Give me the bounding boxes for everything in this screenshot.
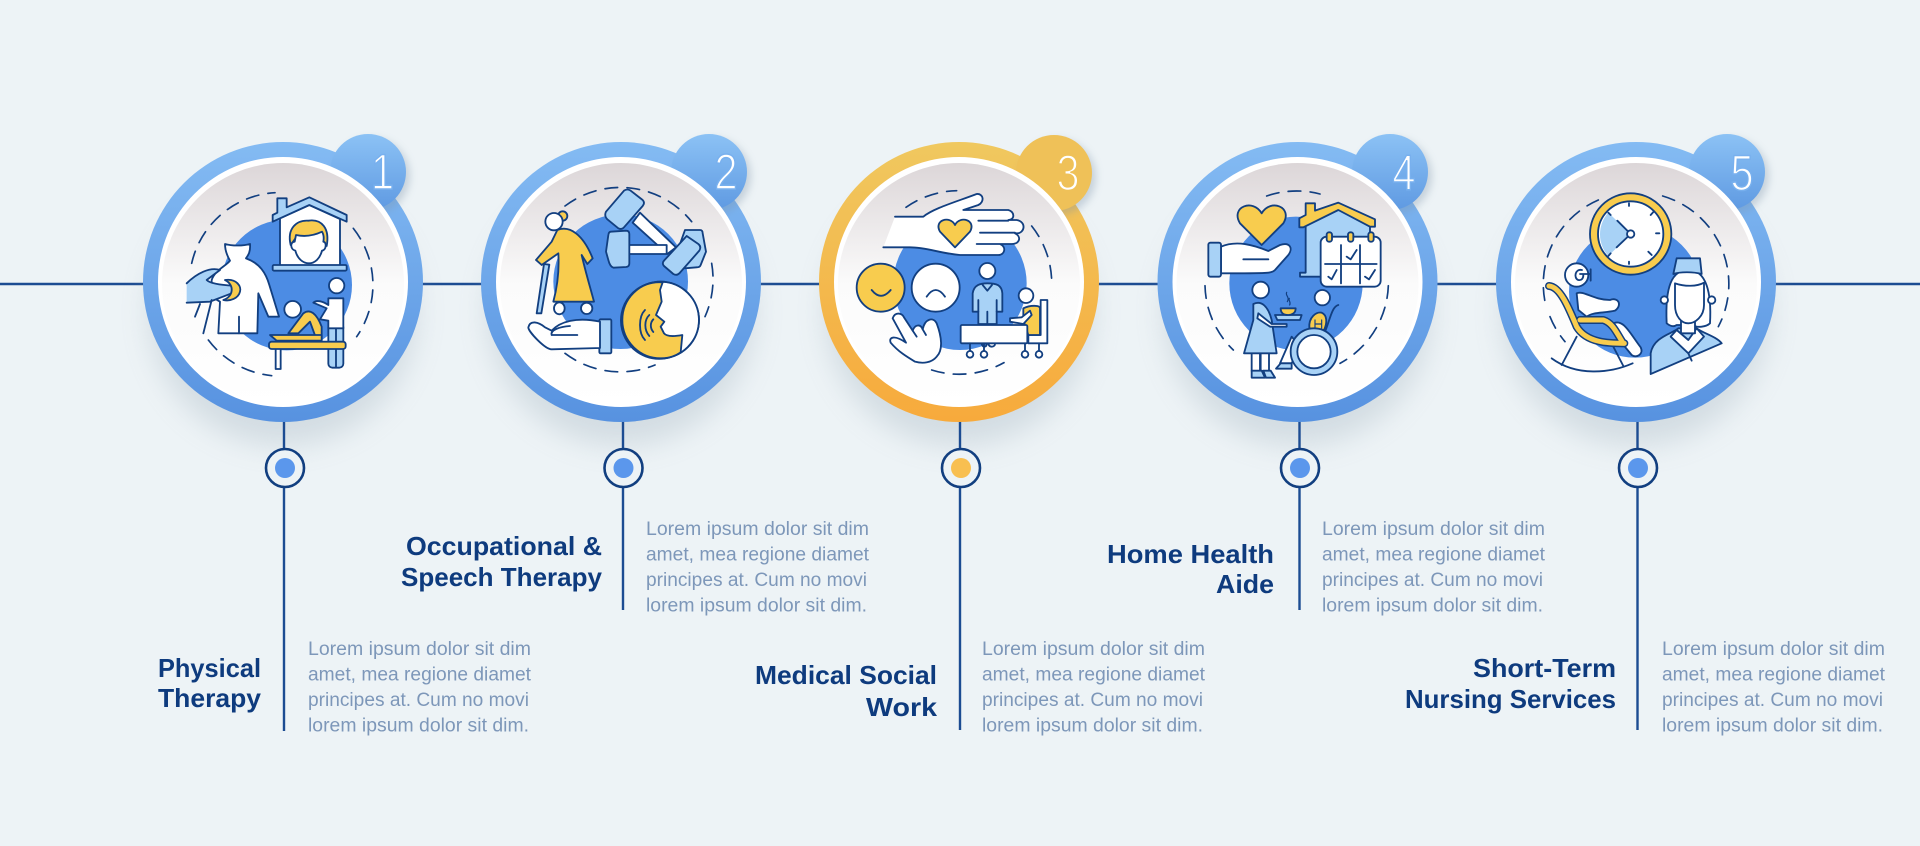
text block: amet, mea regione diamet xyxy=(1662,664,1886,686)
text block: amet, mea regione diamet xyxy=(982,664,1206,686)
icon: short-term nursing services xyxy=(1543,193,1729,374)
text block: Lorem ipsum dolor sit dim xyxy=(1662,639,1885,660)
text block: lorem ipsum dolor sit dim. xyxy=(982,716,1203,736)
icon: home health aide xyxy=(1205,191,1388,378)
number badge 4: 4 xyxy=(1392,145,1416,201)
number badge 2 xyxy=(671,134,747,210)
heading: Physical xyxy=(158,653,261,683)
text block: principes at. Cum no movi xyxy=(1322,570,1543,591)
heading: Work xyxy=(866,692,938,722)
text block: amet, mea regione diamet xyxy=(308,664,532,686)
text block: Lorem ipsum dolor sit dim xyxy=(646,519,869,540)
heading xyxy=(1107,539,1274,599)
heading: Medical Social xyxy=(755,660,937,690)
icon: occupational and speech therapy xyxy=(528,187,713,372)
number badge 4 xyxy=(1352,134,1428,210)
heading xyxy=(755,660,938,722)
text block xyxy=(646,519,870,616)
text block: Lorem ipsum dolor sit dim xyxy=(982,639,1205,660)
heading xyxy=(401,531,603,592)
timeline axis xyxy=(0,283,1920,285)
panel: step 4 Home Health Aide xyxy=(1107,134,1546,616)
heading xyxy=(158,653,262,713)
icon: medical social work xyxy=(857,191,1052,374)
heading: Occupational & xyxy=(406,531,602,561)
text block: amet, mea regione diamet xyxy=(646,544,870,566)
node 1 xyxy=(266,449,304,487)
text block xyxy=(982,639,1206,736)
number badge 1: 1 xyxy=(371,144,394,200)
panel: step 3 Medical Social Work xyxy=(755,135,1206,736)
ring 5 xyxy=(1496,142,1776,422)
number badge 1 xyxy=(330,134,406,210)
panel: step 1 Physical Therapy xyxy=(143,134,532,736)
panel: step 2 Occupational and Speech Therapy xyxy=(401,134,870,616)
text block xyxy=(308,639,532,736)
heading: Aide xyxy=(1216,569,1274,599)
node 2 xyxy=(604,449,642,487)
heading: Home Health xyxy=(1107,539,1274,569)
number badge 5 xyxy=(1689,134,1765,210)
icon: physical therapy xyxy=(187,193,373,376)
text block: Lorem ipsum dolor sit dim xyxy=(308,639,531,660)
number badge 3 xyxy=(1016,135,1092,211)
text block: amet, mea regione diamet xyxy=(1322,544,1546,566)
heading: Nursing Services xyxy=(1405,684,1616,714)
text block xyxy=(1322,519,1546,616)
text block: lorem ipsum dolor sit dim. xyxy=(308,716,529,736)
number badge 3: 3 xyxy=(1056,145,1080,201)
text block: principes at. Cum no movi xyxy=(308,690,529,711)
heading: Short-Term xyxy=(1473,653,1616,683)
text block: lorem ipsum dolor sit dim. xyxy=(1662,716,1883,736)
number badge 5: 5 xyxy=(1730,145,1754,201)
ring 1 xyxy=(143,142,423,422)
heading: Therapy xyxy=(158,683,262,713)
text block xyxy=(1662,639,1886,736)
text block: lorem ipsum dolor sit dim. xyxy=(646,596,867,616)
node 4 xyxy=(1281,449,1319,487)
text block: principes at. Cum no movi xyxy=(982,690,1203,711)
text block: lorem ipsum dolor sit dim. xyxy=(1322,596,1543,616)
number badge 2: 2 xyxy=(714,144,738,200)
ring 3 xyxy=(819,142,1099,422)
heading: Speech Therapy xyxy=(401,562,603,592)
heading xyxy=(1405,653,1616,714)
ring 4 xyxy=(1158,142,1438,422)
node 3 xyxy=(942,449,980,487)
text block: principes at. Cum no movi xyxy=(1662,690,1883,711)
panel: step 5 Short-Term Nursing Services xyxy=(1405,134,1886,736)
text block: principes at. Cum no movi xyxy=(646,570,867,591)
text block: Lorem ipsum dolor sit dim xyxy=(1322,519,1545,540)
node 5 xyxy=(1619,449,1657,487)
ring 2 xyxy=(481,142,761,422)
